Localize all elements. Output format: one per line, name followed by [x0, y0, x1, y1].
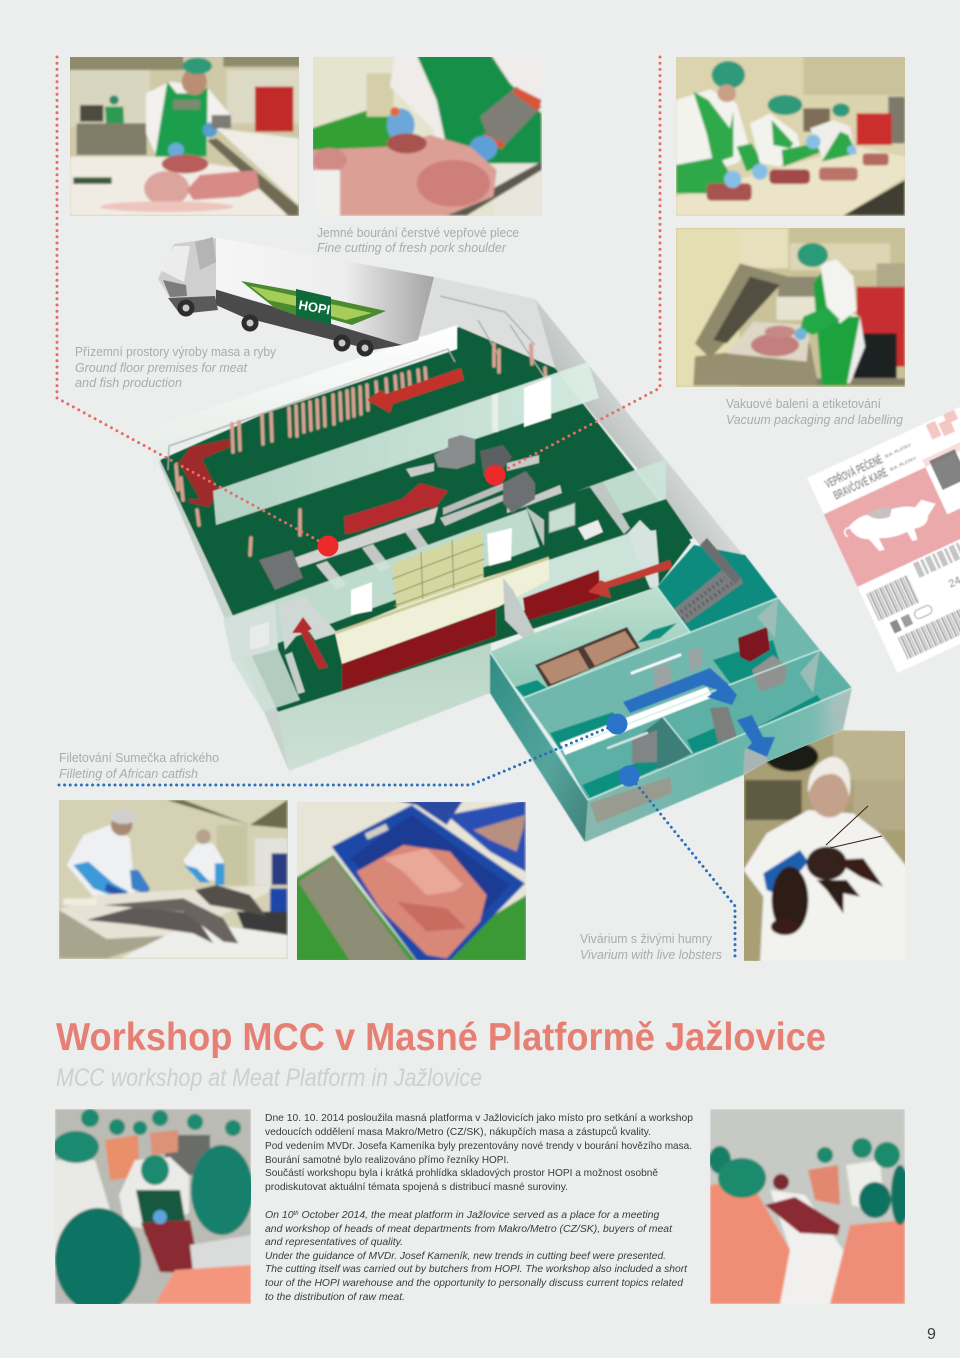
body text Czech: prodiskutovat aktuální témata spojená s distribucí masné suroviny. — [265, 1181, 568, 1193]
subtitle: MCC workshop at Meat Platform in Jažlovice — [56, 1064, 482, 1092]
caption: ground floor: Ground floor premises for meat — [75, 361, 248, 375]
product label with pig: VEPŘOVÁ PEČENÉ — [823, 453, 885, 491]
caption: catfish: Filleting of African catfish — [59, 767, 198, 781]
product label with pig — [807, 381, 960, 673]
photo: workshop group right — [709, 1109, 909, 1304]
left rooms — [225, 596, 337, 712]
blue flow arrow small — [737, 715, 775, 757]
teal band between walls — [523, 598, 820, 750]
caption: fine cutting — [317, 226, 519, 255]
partition between racks — [503, 578, 535, 640]
photo: butcher cutting pork — [67, 53, 303, 220]
red arrow on rack row — [588, 560, 672, 598]
product label with pig: BRAVČOVÉ KARÉ — [832, 466, 890, 503]
front wall of meat area — [278, 643, 491, 771]
body text Czech: Dne 10. 10. 2014 posloužila masná platforma v Jažlovicích jako místo pro setkání a workshop — [265, 1112, 693, 1124]
grey box machine — [259, 550, 303, 590]
inner room walls — [640, 717, 692, 770]
delivery truck with HOPI logo — [158, 237, 434, 356]
photo: crate of catfish fillets — [295, 800, 528, 963]
blue dotted leader catfish — [59, 724, 617, 785]
wall between rear room and processing line — [213, 362, 599, 525]
caption: vivarium: Vivarium with live lobsters — [580, 948, 722, 962]
lobster tanks — [535, 627, 640, 687]
rear room wall — [415, 277, 555, 394]
mid wall — [503, 530, 659, 612]
white passage in teal room — [560, 687, 713, 755]
caption: vivarium: Vivárium s živými humry — [580, 932, 713, 946]
outer right wall — [535, 299, 778, 638]
blue flow arrow curved — [623, 668, 737, 713]
body text Czech: Pod vedením MVDr. Josefa Kameníka byly prezentovány nové trendy v bourání hovězího masa. — [265, 1140, 692, 1152]
teal section: mint wall — [490, 587, 690, 698]
fish tray — [590, 777, 672, 823]
teal floors in band — [550, 640, 810, 750]
caption: fine cutting: Fine cutting of fresh pork shoulder — [317, 241, 507, 255]
white ceiling bars — [608, 655, 795, 748]
central partition wall — [223, 459, 666, 660]
photo: filleting catfish — [57, 798, 290, 962]
red dotted leader left — [57, 57, 328, 546]
body text English: and representatives of quality. — [265, 1236, 403, 1248]
maroon racks — [342, 608, 496, 691]
product label with pig: B.K. PLÁTKY — [889, 455, 917, 472]
blue dotted leader vivarium — [629, 775, 735, 960]
red arrow along carcass line — [367, 368, 464, 413]
main green floor — [160, 327, 691, 712]
teal floors in front band — [582, 695, 827, 798]
front teal band — [560, 650, 852, 800]
red dotted leader right — [495, 57, 660, 475]
title: Workshop MCC v Masné Platformě Jažlovice — [56, 1016, 826, 1059]
body text Czech: Součástí workshopu byla i krátká prohlídka skladových prostor HOPI a možnost osobně — [265, 1167, 658, 1179]
caption: fine cutting: Jemné bourání čerstvé vepřové plece — [317, 226, 519, 240]
teal section: rear-right floor — [657, 545, 778, 632]
body text Czech — [265, 1112, 693, 1193]
body text English: tour of the HOPI warehouse and the opportunity to personally discuss current topics related — [265, 1277, 684, 1289]
left side wall — [145, 430, 289, 771]
photo: packers at the table — [673, 55, 908, 218]
red marker left — [318, 536, 338, 556]
body text English: and workshop of heads of meat departments from Makro/Metro (CZ/SK), buyers of meat — [265, 1223, 673, 1235]
grey door box — [743, 748, 767, 775]
caption: vacuum packaging — [726, 397, 903, 427]
caption: vacuum packaging: Vakuové balení a etiketování — [726, 397, 882, 411]
blue marker lower — [618, 766, 640, 786]
pale cyan wall edges — [490, 587, 852, 800]
page number: 9 — [927, 1326, 936, 1343]
hanging carcasses — [176, 344, 546, 555]
red corner arrow — [179, 439, 230, 507]
photo: fine cutting of pork shoulder — [310, 53, 547, 220]
back wall, white — [145, 325, 457, 470]
photo: man holding lobster — [742, 730, 907, 962]
red arrow on conveyor — [344, 483, 448, 534]
white door in upper wall — [524, 377, 551, 427]
overhead rail — [168, 296, 545, 470]
product label with pig: B.K. PLÁTKY — [884, 441, 912, 459]
grey processing machines — [434, 435, 535, 513]
white doors in partition — [487, 528, 512, 566]
caption: vivarium — [580, 932, 722, 962]
body text English: to the distribution of raw meat. — [265, 1291, 405, 1303]
caption: ground floor — [75, 345, 277, 390]
red marker right — [484, 464, 506, 486]
caption: ground floor: Přízemní prostory výroby masa a ryby — [75, 345, 277, 359]
left teal wall — [490, 652, 588, 842]
teal floor strips — [515, 623, 677, 698]
HOPI wordmark: HOPI — [297, 297, 331, 317]
red arrow front left — [292, 617, 328, 669]
maroon crate — [738, 627, 770, 662]
body text English — [265, 1209, 688, 1303]
caption: catfish — [59, 751, 219, 781]
photo: workshop group left — [53, 1109, 253, 1312]
body text Czech: Bourání samotné bylo realizováno přímo řezníky HOPI. — [265, 1154, 509, 1166]
caption: catfish: Filetování Sumečka afrického — [59, 751, 219, 765]
right green room — [617, 499, 693, 558]
blue marker upper — [606, 714, 628, 734]
caption: ground floor: and fish production — [75, 376, 182, 390]
caption: vacuum packaging: Vacuum packaging and labelling — [726, 413, 903, 427]
body text English: th — [294, 1211, 299, 1217]
floor plan of the ground floor — [145, 277, 852, 842]
translucent side walls — [757, 598, 852, 727]
photo: vacuum packaging machine — [673, 225, 908, 388]
small office — [526, 487, 624, 560]
body text English: The cutting itself was carried out by butchers from HOPI. The workshop also included a short — [265, 1263, 688, 1275]
storage shelves — [335, 530, 549, 664]
front teal wall — [585, 688, 852, 842]
body text Czech: vedoucích oddělení masa Makro/Metro (CZ/SK), nákupčích masa a zástupců kvality. — [265, 1126, 651, 1138]
body text English: Under the guidance of MVDr. Josef Kameník, new trends in cutting beef were presented. — [265, 1250, 666, 1262]
staircase — [673, 538, 743, 623]
body text English: On 10 — [265, 1209, 294, 1221]
body text English: October 2014, the meat platform in Jažlovice served as a place for a meeting — [299, 1209, 659, 1221]
conveyor line — [294, 455, 562, 589]
grey boxes — [752, 655, 787, 692]
